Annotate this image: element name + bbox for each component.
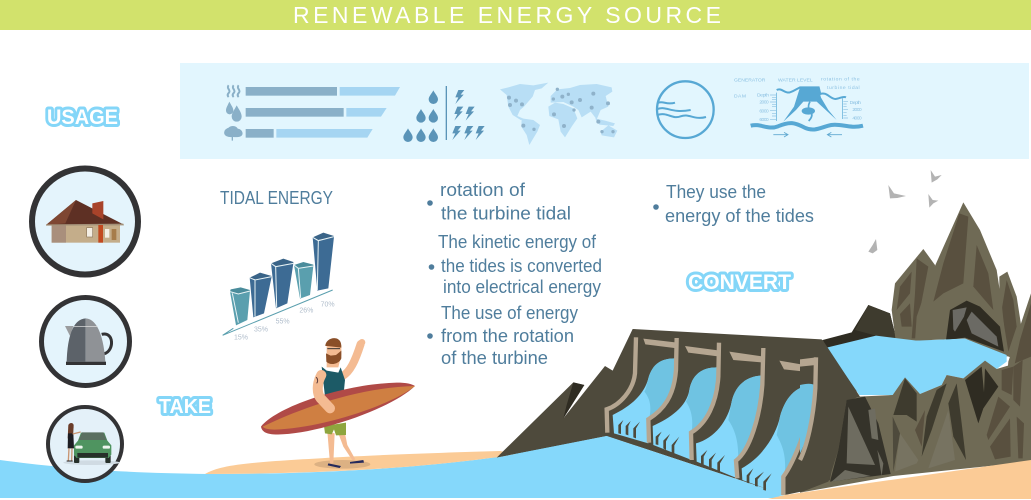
- dam tan lintels: [643, 339, 814, 373]
- heading: tidal energy: TIDAL ENERGY: [220, 188, 333, 208]
- text: rotation of the turbine tidal: the turbine tidal: [441, 204, 571, 224]
- tidal dam diagram: 2000: [852, 107, 862, 113]
- black rock: [823, 305, 897, 348]
- title banner: RENEWABLE ENERGY SOURCE: [293, 2, 721, 28]
- sand foreground: [768, 460, 1031, 499]
- text: use of energy from the rotation: from the rotation: [441, 326, 574, 346]
- front rocks: [800, 357, 1031, 493]
- text: use of energy from the rotation: of the turbine: [441, 348, 548, 368]
- world map: [500, 83, 617, 145]
- text: rotation of the turbine tidal: rotation of: [440, 180, 526, 200]
- dam tan frames: [607, 337, 813, 495]
- 3D bar chart: 26%: [299, 308, 313, 315]
- icon: water drops and lightning pyramid: [403, 86, 485, 142]
- lake: [827, 336, 1007, 395]
- tidal dam diagram: 4000: [852, 116, 862, 122]
- text: rotation of the turbine tidal: [427, 180, 571, 224]
- tidal dam diagram: 6000: [759, 117, 769, 123]
- tidal dam diagram: [734, 77, 863, 137]
- peaks: [1000, 293, 1031, 460]
- 3D bar chart: 35%: [254, 326, 268, 333]
- tidal dam diagram: rotation of the: [821, 77, 860, 83]
- text: kinetic energy of the tides: The kinetic energy of: [438, 232, 597, 252]
- dam body: [497, 329, 857, 495]
- tidal dam diagram: DAM: [734, 93, 746, 99]
- tidal dam diagram: 6000: [759, 108, 769, 114]
- tidal dam diagram: 2000: [759, 100, 769, 106]
- water: [0, 436, 785, 498]
- text: energy of the tides: energy of the tides: [665, 206, 814, 226]
- 3D bar chart: 15%: [234, 335, 248, 342]
- 3D bar chart: 55%: [276, 319, 290, 326]
- turbine teeth: [618, 420, 772, 491]
- label: usage: USAGE: [47, 106, 118, 129]
- title banner: [0, 0, 1031, 30]
- mountains and reservoir: [800, 202, 1031, 493]
- dam right flank: [800, 339, 860, 493]
- tidal dam diagram: WATER LEVEL: [778, 77, 813, 83]
- 3D bar chart: [223, 233, 335, 342]
- text: energy of the tides: [653, 182, 814, 226]
- label: take: TAKE: [159, 396, 211, 418]
- text: use of energy from the rotation: The use of energy: [441, 303, 578, 323]
- tidal dam diagram: Depth: [850, 100, 861, 106]
- text: use of energy from the rotation: [427, 303, 578, 368]
- 3D bar chart: 70%: [321, 301, 335, 308]
- text: kinetic energy of the tides: [429, 232, 602, 297]
- text: energy of the tides: They use the: [666, 182, 766, 202]
- birds: [868, 170, 942, 253]
- circle icon: car and woman: [48, 407, 122, 481]
- tidal dam diagram: GENERATOR: [734, 77, 766, 83]
- surfer with surfboard: [261, 338, 415, 469]
- text: kinetic energy of the tides: into electrical energy: [443, 277, 601, 297]
- circle icon: house: [32, 168, 138, 274]
- sand beach: [205, 451, 520, 474]
- tidal dam diagram: turbine tidal: [827, 85, 860, 91]
- panel: usage strip: [180, 63, 1029, 159]
- right side rocks: [1013, 303, 1031, 388]
- horizontal bar chart with icons: [224, 85, 400, 141]
- hydro dam: [490, 329, 857, 498]
- text: kinetic energy of the tides: the tides is converted: [441, 256, 602, 276]
- circle icon: kettle: [42, 298, 130, 386]
- icon: waves in circle: [657, 81, 714, 138]
- spillway chutes: [613, 358, 813, 495]
- tidal dam diagram: Depth: [757, 93, 769, 99]
- label: convert: CONVERT: [688, 271, 791, 294]
